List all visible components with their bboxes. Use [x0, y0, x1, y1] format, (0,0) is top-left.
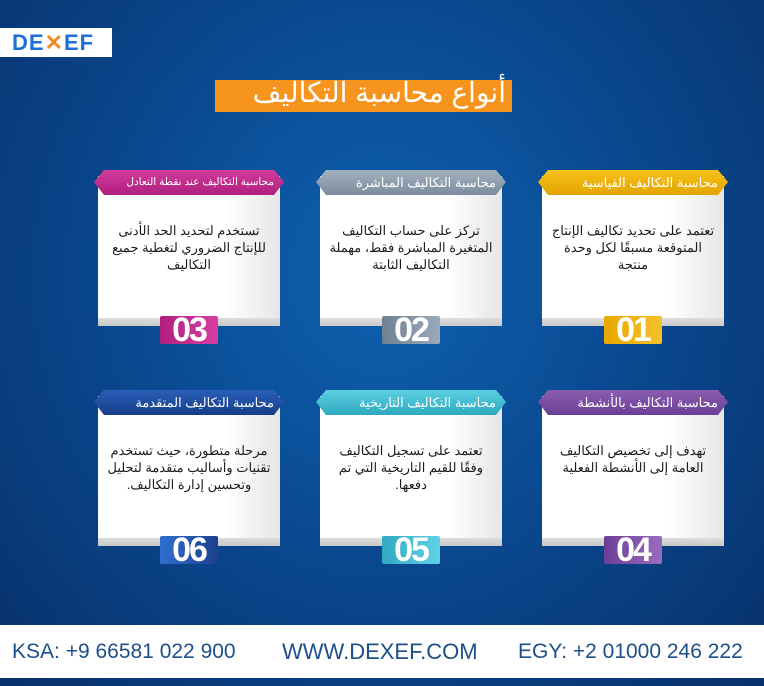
card 04: [538, 390, 728, 564]
badge 03: [160, 316, 218, 344]
card 05: [316, 390, 506, 564]
header 02: محاسبة التكاليف المباشرة: [356, 175, 496, 190]
header 06: [94, 390, 284, 415]
card 02: [316, 170, 506, 344]
footer: KSA phone: KSA: +9 66581 022 900: [12, 640, 236, 663]
card 01: [538, 170, 728, 344]
logo: [0, 28, 112, 57]
badge 05: [382, 536, 440, 564]
card 06: [94, 390, 284, 564]
header 04: محاسبة التكاليف بالأنشطة: [577, 395, 718, 410]
header 06: محاسبة التكاليف المتقدمة: [135, 395, 274, 410]
footer: [0, 625, 764, 678]
header 03: [94, 170, 284, 195]
card 03: [94, 170, 284, 344]
badge 01: [604, 316, 662, 344]
header 03: محاسبة التكاليف عند نقطة التعادل: [126, 176, 274, 188]
badge 02: [382, 316, 440, 344]
text 02: تركز على حساب التكاليف المتغيرة المباشرة فقط، مهملة التكاليف الثابتة: [330, 223, 492, 272]
footer: EGY phone: EGY: +2 01000 246 222: [518, 640, 743, 663]
title: [215, 80, 512, 112]
header 04: [538, 390, 728, 415]
logo: DE✕EF: [12, 30, 94, 55]
header 05: [316, 390, 506, 415]
text 01: تعتمد على تحديد تكاليف الإنتاج المتوقعة مسبقًا لكل وحدة منتجة: [552, 223, 714, 272]
header 05: محاسبة التكاليف التاريخية: [359, 395, 496, 410]
header 01: محاسبة التكاليف القياسية: [582, 175, 718, 190]
header 02: [316, 170, 506, 195]
badge 04: [604, 536, 662, 564]
title: أنواع محاسبة التكاليف: [253, 77, 506, 108]
text 06: مرحلة متطورة، حيث تستخدم تقنيات وأساليب متقدمة لتحليل وتحسين إدارة التكاليف.: [107, 443, 271, 492]
text 05: تعتمد على تسجيل التكاليف وفقًا للقيم التاريخية التي تم دفعها.: [339, 443, 483, 492]
footer: website: WWW.DEXEF.COM: [282, 639, 478, 664]
text 04: تهدف إلى تخصيص التكاليف العامة إلى الأنشطة الفعلية: [560, 443, 706, 475]
badge 06: [160, 536, 218, 564]
text 03: تستخدم لتحديد الحد الأدنى للإنتاج الضروري لتغطية جميع التكاليف: [112, 223, 266, 272]
header 01: [538, 170, 728, 195]
